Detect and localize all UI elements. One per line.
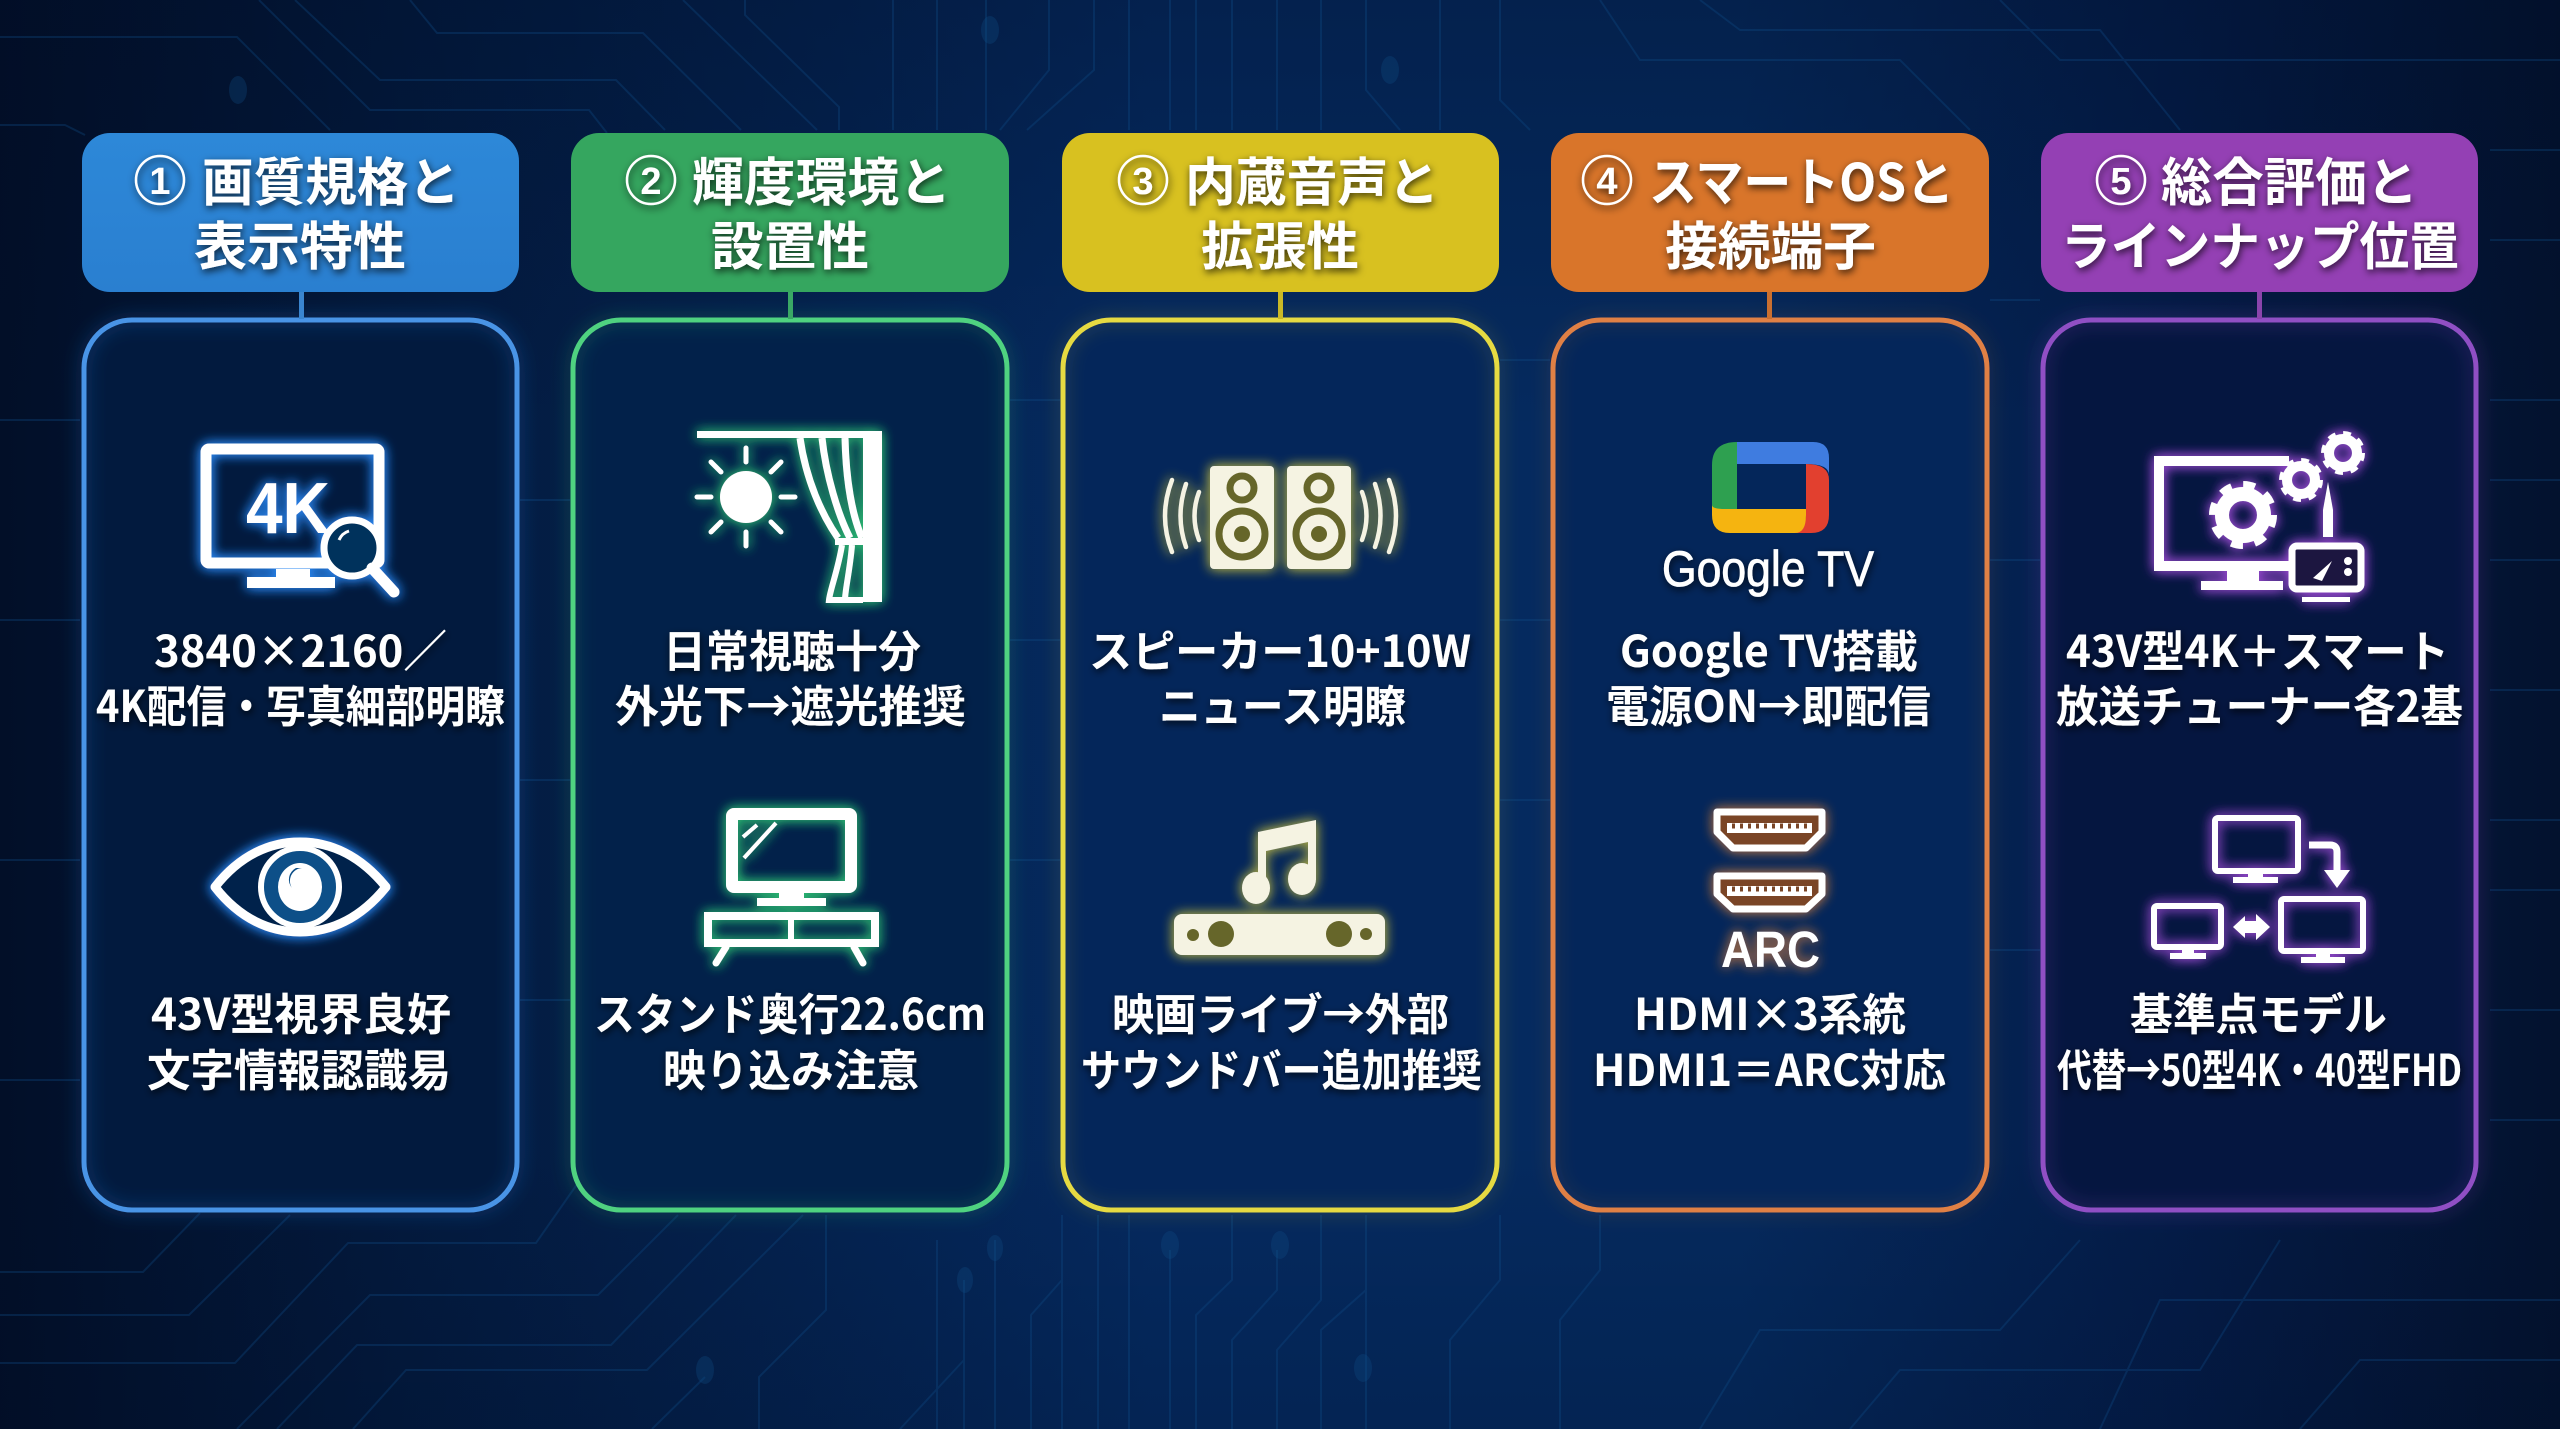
text: column 4 lower: HDMI×3系統: [1634, 979, 1906, 1043]
text: column 2 upper: [615, 616, 966, 735]
heading: column 3: 内蔵音声と: [1185, 141, 1439, 216]
column 4: smart OS: [1551, 133, 1989, 1210]
text: column 4 upper: Google TV搭載: [1620, 616, 1918, 680]
text: column 1 upper: [96, 616, 505, 735]
icon: eye: [215, 842, 386, 932]
connector: column 4: [1767, 292, 1772, 319]
text: column 1 upper: 3840×2160／: [154, 616, 447, 680]
icon: 4K monitor with magnifier: [206, 449, 394, 592]
heading: column 2: 設置性: [711, 205, 869, 280]
panel: column 2 body: [573, 320, 1007, 1210]
text: column 5 upper: [2056, 616, 2463, 735]
heading: column 1: 画質規格と: [202, 141, 460, 216]
heading: column 1: 1: [149, 161, 171, 203]
icon: HDMI ports with ARC: [1717, 812, 1822, 978]
icon: Google TV logo: Google TV: [1662, 541, 1875, 597]
heading: column 1: [82, 133, 519, 292]
icon: HDMI ports with ARC: ARC: [1721, 921, 1820, 978]
text: column 2 lower: 映り込み注意: [663, 1035, 919, 1099]
icon: TV on stand: [708, 814, 875, 963]
connector: column 5: [2257, 292, 2262, 319]
connector: column 2: [788, 292, 793, 319]
heading: column 5: 5: [2110, 161, 2132, 203]
heading: column 3: 3: [1132, 161, 1154, 203]
heading: column 2: [571, 133, 1009, 292]
text: column 2 lower: [594, 979, 986, 1099]
text: column 4 lower: [1593, 979, 1946, 1099]
panel: column 5 body: [2043, 320, 2476, 1210]
text: column 3 lower: 映画ライブ→外部: [1112, 979, 1449, 1043]
text: column 4 upper: [1606, 616, 1931, 735]
text: column 5 upper: 43V型4K＋スマート: [2066, 616, 2449, 680]
text: column 1 lower: 文字情報認識易: [147, 1035, 451, 1099]
text: column 3 upper: [1089, 616, 1471, 735]
text: column 1 lower: 43V型視界良好: [151, 979, 451, 1043]
heading: column 2: 輝度環境と: [692, 141, 951, 216]
panel: column 1 body: [84, 320, 517, 1210]
text: column 1 lower: [147, 979, 451, 1099]
panel: column 4 body: [1553, 320, 1987, 1210]
icon: speakers with sound waves: [1165, 466, 1396, 569]
heading: column 1: 表示特性: [194, 205, 406, 280]
text: column 5 lower: 基準点モデル: [2130, 979, 2387, 1043]
connector: column 3: [1278, 292, 1283, 319]
text: column 3 upper: ニュース明瞭: [1159, 671, 1406, 735]
icon: three monitors with arrows: [2154, 818, 2363, 963]
icon: 4K monitor with magnifier: 4K: [246, 469, 330, 549]
connector: column 1: [299, 292, 304, 319]
column 5: overall evaluation: [2041, 133, 2478, 1210]
heading: column 4: 4: [1596, 161, 1618, 203]
text: column 3 lower: サウンドバー追加推奨: [1081, 1035, 1482, 1099]
heading: column 4: 接続端子: [1665, 205, 1876, 280]
column 1: picture quality: [82, 133, 519, 1210]
column 2: brightness and placement: [571, 133, 1009, 1210]
text: column 2 upper: 日常視聴十分: [663, 616, 921, 680]
heading: column 4: [1551, 133, 1989, 292]
panel: column 3 body: [1063, 320, 1497, 1210]
heading: column 3: 拡張性: [1201, 205, 1359, 280]
heading: column 5: [2041, 133, 2478, 292]
heading: column 4: スマートOSと: [1649, 141, 1954, 216]
icon: Google TV logo: [1662, 442, 1875, 597]
text: column 5 upper: 放送チューナー各2基: [2056, 671, 2463, 735]
icon: monitor, gears and tuner: [2159, 434, 2362, 602]
heading: column 5: 総合評価と: [2161, 141, 2418, 216]
text: column 3 upper: スピーカー10+10W: [1089, 616, 1471, 680]
heading: column 2: 2: [640, 161, 662, 203]
icon: music note and soundbar: [1174, 820, 1385, 955]
icon: sun and curtain: [697, 431, 882, 602]
heading: column 5: ラインナップ位置: [2061, 205, 2459, 280]
column 3: audio: [1062, 133, 1499, 1210]
heading: column 3: [1062, 133, 1499, 292]
text: column 3 lower: [1081, 979, 1482, 1099]
text: column 1 upper: 4K配信・写真細部明瞭: [96, 671, 505, 735]
text: column 4 lower: HDMI1＝ARC対応: [1593, 1035, 1946, 1099]
text: column 5 lower: 代替→50型4K・40型FHD: [2057, 1035, 2462, 1099]
text: column 2 lower: スタンド奥行22.6cm: [594, 979, 986, 1043]
text: column 2 upper: 外光下→遮光推奨: [615, 671, 966, 735]
text: column 5 lower: [2057, 979, 2462, 1099]
text: column 4 upper: 電源ON→即配信: [1606, 671, 1931, 735]
